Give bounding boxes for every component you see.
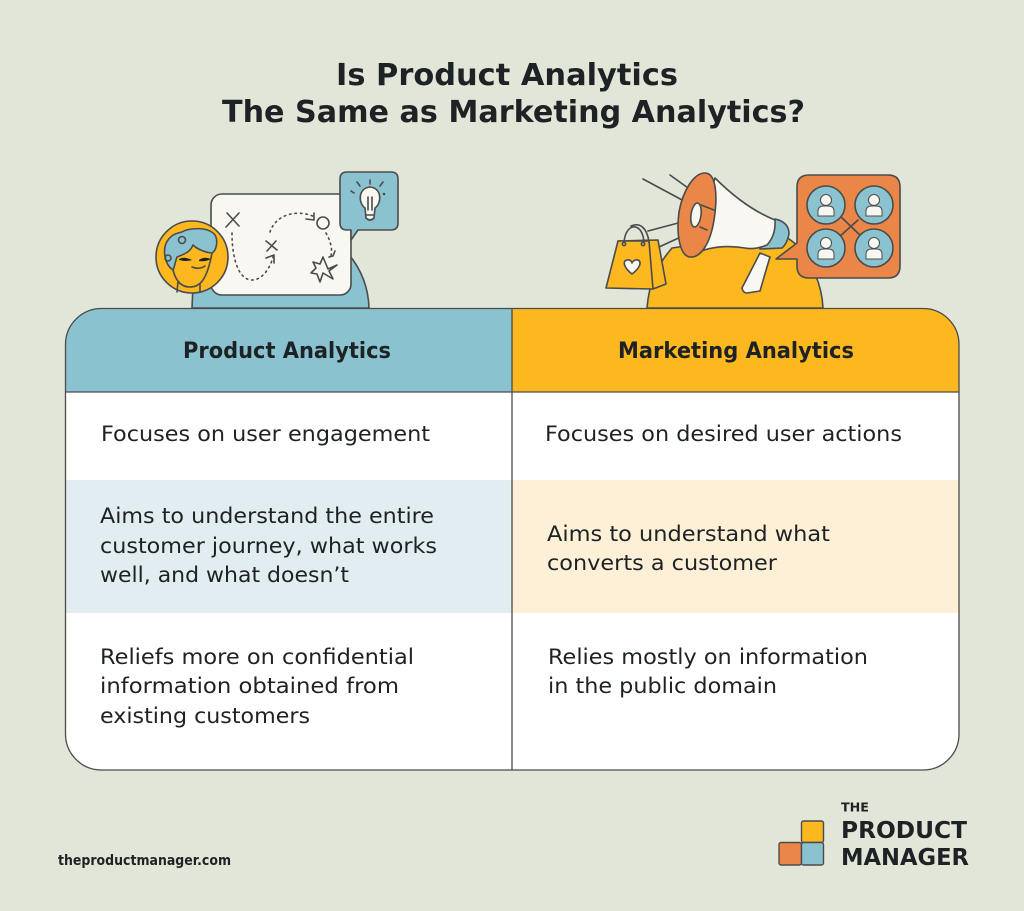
text: aims left: customer journey, what works [100,534,437,559]
speech bubble: light bulb [340,172,398,240]
text: reliefs left: Reliefs more on confidential [100,645,414,670]
text: relies right: in the public domain [548,674,777,699]
footer url: theproductmanager.com [58,853,231,869]
shopping bag [606,225,666,289]
avatar [156,221,228,293]
logo mark [779,821,824,865]
horn [692,178,775,255]
header: marketing analytics [512,308,959,392]
text: aims left: well, and what doesn’t [100,563,349,588]
text: focuses left: Focuses on user engagement [101,422,430,447]
text: reliefs left: existing customers [100,704,310,729]
table outline [66,308,959,770]
text: reliefs left [100,645,414,729]
comparison table [66,308,959,770]
collar [760,219,789,249]
title [222,58,805,130]
text: aims right: converts a customer [547,551,777,576]
bell [678,173,716,257]
megaphone [678,173,789,293]
illustration: marketing analytics [606,173,900,308]
hair [165,229,217,270]
text: relies right [548,645,868,699]
logo wordmark [841,800,969,871]
header: product analytics: Product Analytics [183,339,391,364]
yellow dome [647,232,823,308]
illustration: product analytics [156,172,398,308]
title: Is Product Analytics [336,58,678,93]
heart [624,260,640,274]
text: reliefs left: information obtained from [100,674,399,699]
text: aims right: Aims to understand what [547,522,830,547]
handle [742,253,770,293]
speech bubble: network of people [776,175,900,278]
table body background [66,308,959,770]
text: relies right: Relies mostly on information [548,645,868,670]
eyes [179,258,211,261]
logo wordmark: THE [841,800,869,814]
sound lines [643,175,695,247]
whiteboard with journey map [211,194,351,295]
header: product analytics [66,308,512,392]
blue dome [192,250,369,308]
text: aims left [100,504,437,588]
text: aims left: Aims to understand the entire [100,504,434,529]
row tint: marketing analytics [512,480,959,613]
text: aims right [547,522,830,576]
logo [779,800,969,871]
row tint: product analytics [66,480,512,613]
neck and face [173,253,212,292]
logo wordmark: PRODUCT [841,818,967,844]
header: marketing analytics: Marketing Analytics [618,339,854,364]
title: The Same as Marketing Analytics? [222,95,805,130]
text: focuses right: Focuses on desired user actions [545,422,902,447]
logo wordmark: MANAGER [841,845,969,871]
